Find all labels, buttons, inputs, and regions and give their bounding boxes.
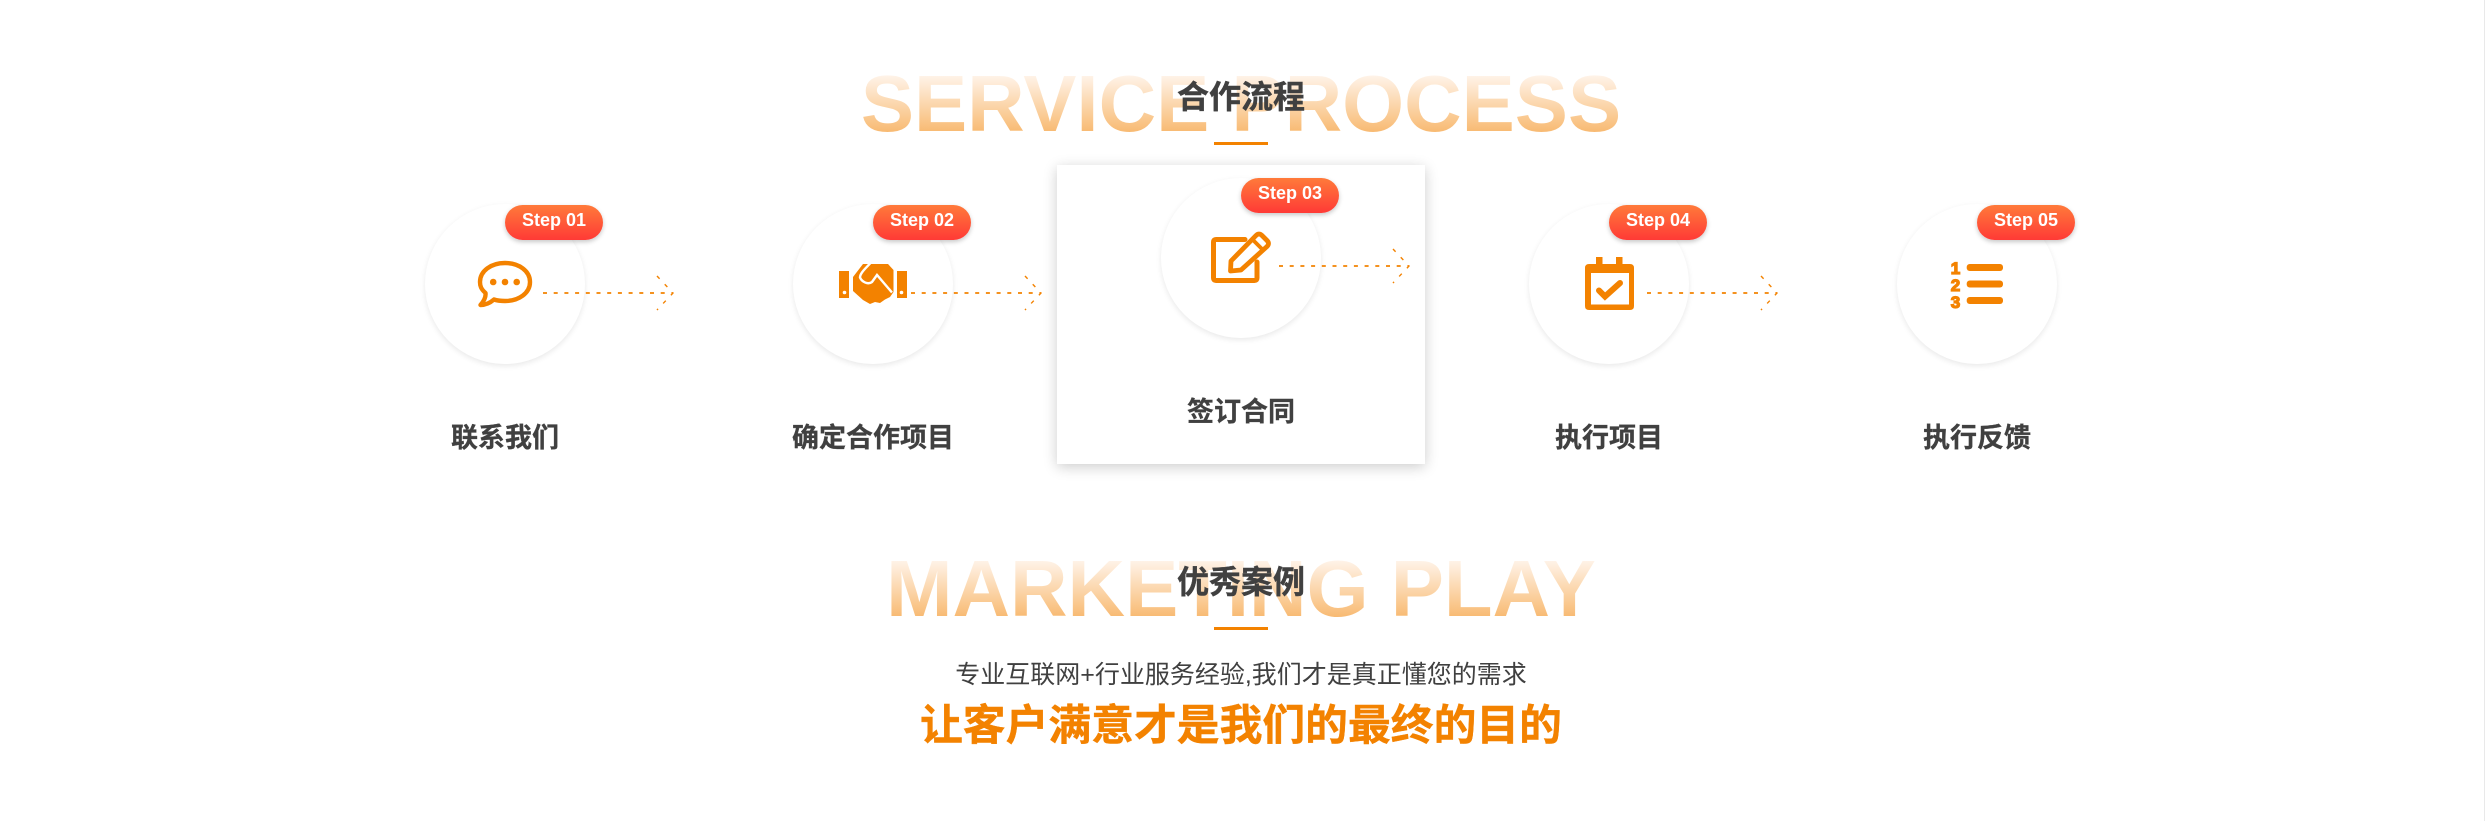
circle <box>793 204 953 364</box>
label: 执行项目 <box>1555 423 1663 453</box>
badge: Step 01: Step 01 <box>522 210 586 230</box>
badge: Step 04: Step 04 <box>1626 210 1690 230</box>
circle <box>1161 178 1321 338</box>
badge: Step 02: Step 02 <box>890 210 954 230</box>
heading: 合作流程: 合作流程 <box>1177 79 1305 115</box>
label: 联系我们 <box>451 423 559 453</box>
arrow <box>1279 248 1410 284</box>
heading underline <box>1214 627 1268 630</box>
step 1: 联系我们 <box>424 204 674 453</box>
step 3: 签订合同 <box>1160 178 1410 427</box>
icon: edit pencil <box>1211 232 1271 283</box>
badge: Step 01 <box>505 205 603 240</box>
label: 执行反馈 <box>1923 423 2031 453</box>
background title: SERVICE PROCESS: SERVICE PROCESS <box>861 59 1621 148</box>
icon: numbered list: 2 <box>1951 276 1960 295</box>
heading: 优秀案例: 优秀案例 <box>1177 564 1305 600</box>
orange slogan: 让客户满意才是我们的最终的目的 <box>920 702 1562 750</box>
label: 确定合作项目 <box>792 423 954 453</box>
circle <box>1897 204 2057 364</box>
icon: handshake <box>839 264 907 304</box>
label: 签订合同 <box>1187 397 1295 427</box>
badge: Step 05: Step 05 <box>1994 210 2058 230</box>
badge: Step 05 <box>1977 205 2075 240</box>
badge: Step 04 <box>1609 205 1707 240</box>
background title: MARKETING PLAY: MARKETING PLAY <box>886 544 1596 633</box>
circle <box>425 204 585 364</box>
badge: Step 03: Step 03 <box>1258 183 1322 203</box>
circle <box>1529 204 1689 364</box>
heading underline <box>1214 142 1268 145</box>
icon: numbered list: 3 <box>1951 293 1960 312</box>
icon: numbered list <box>1950 259 2003 312</box>
right page edge line <box>2484 0 2485 821</box>
step 5: 执行反馈 <box>1896 204 2077 453</box>
badge: Step 02 <box>873 205 971 240</box>
arrow <box>1647 276 1778 310</box>
step 4: 执行项目 <box>1528 204 1778 453</box>
badge: Step 03 <box>1241 178 1339 213</box>
arrow <box>911 276 1042 310</box>
arrow <box>543 276 674 310</box>
icon: calendar check <box>1585 257 1634 310</box>
icon: chat bubble <box>478 260 532 308</box>
subtitle text: 专业互联网+行业服务经验,我们才是真正懂您的需求 <box>955 661 1527 689</box>
icon: numbered list: 1 <box>1951 259 1960 278</box>
panel: highlighted step card <box>1057 165 1425 464</box>
step 2: 确定合作项目 <box>792 204 1042 453</box>
